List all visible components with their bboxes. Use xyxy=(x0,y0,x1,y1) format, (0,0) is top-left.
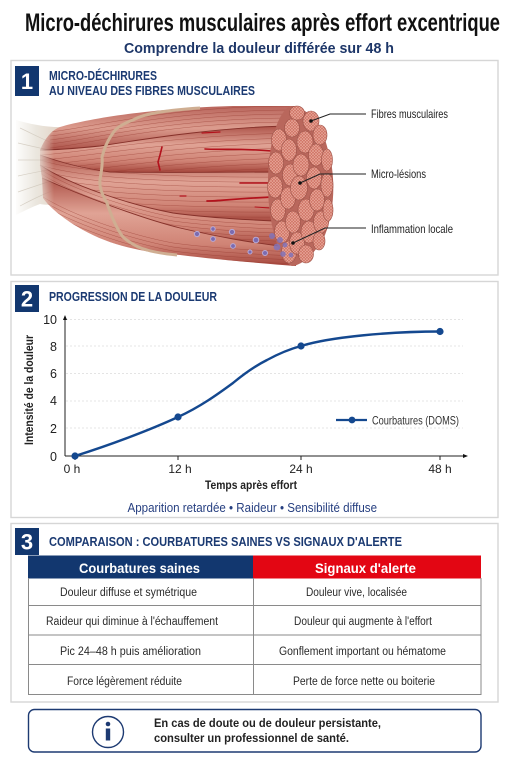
label: fibres musculaires xyxy=(309,107,448,123)
panel 2: pain progression xyxy=(11,282,498,518)
y tick labels: 2 xyxy=(50,422,57,436)
panel 1 heading xyxy=(49,68,255,98)
panel 3: comparison xyxy=(11,524,498,702)
label: inflammation locale: Inflammation locale xyxy=(371,222,453,236)
right column items xyxy=(279,587,446,688)
inflammation cells xyxy=(194,227,268,256)
left column items xyxy=(46,587,219,688)
left column items: Douleur diffuse et symétrique xyxy=(60,587,197,599)
badge 2 xyxy=(15,285,39,312)
label: inflammation locale xyxy=(291,222,453,245)
advice text xyxy=(154,718,381,745)
subtitle: Comprendre la douleur différée sur 48 h xyxy=(124,41,394,57)
muscle illustration xyxy=(16,106,333,268)
x tick labels: 12 h xyxy=(168,462,192,476)
right column items: Douleur vive, localisée xyxy=(306,587,407,599)
advice text: consulter un professionnel de santé. xyxy=(154,733,349,745)
panel 1 heading: AU NIVEAU DES FIBRES MUSCULAIRES xyxy=(49,84,255,98)
badge 1: 1 xyxy=(21,69,33,94)
right column items: Douleur qui augmente à l'effort xyxy=(294,616,433,628)
header: courbatures saines: Courbatures saines xyxy=(79,560,200,576)
badge 3: 3 xyxy=(21,530,33,554)
header: signaux d'alerte xyxy=(253,556,481,578)
header: courbatures saines xyxy=(28,556,253,578)
badge 2: 2 xyxy=(21,286,33,312)
badge 3 xyxy=(15,528,39,555)
y tick labels xyxy=(43,313,57,464)
cross-section of fascicles xyxy=(268,106,333,266)
left column items: Raideur qui diminue à l'échauffement xyxy=(46,616,219,628)
advice text: En cas de doute ou de douleur persistante, xyxy=(154,718,381,730)
panel 1 heading: MICRO-DÉCHIRURES xyxy=(49,68,157,83)
y tick labels: 0 xyxy=(50,450,57,464)
comparison table xyxy=(28,556,481,694)
legend xyxy=(336,414,459,428)
x axis title: Temps après effort xyxy=(205,478,297,492)
connective band xyxy=(100,108,200,255)
label: micro-lésions xyxy=(298,167,426,185)
x tick labels: 0 h xyxy=(64,462,80,476)
left column items: Force légèrement réduite xyxy=(67,676,182,688)
left column items: Pic 24–48 h puis amélioration xyxy=(60,646,201,658)
axes xyxy=(63,315,468,460)
label: fibres musculaires: Fibres musculaires xyxy=(371,107,448,121)
right column items: Perte de force nette ou boiterie xyxy=(293,676,435,688)
micro-tears xyxy=(158,132,272,208)
callout: advice xyxy=(28,710,481,752)
panel 1: muscle fibres xyxy=(11,60,498,275)
header: signaux d'alerte: Signaux d'alerte xyxy=(315,560,416,576)
right column items: Gonflement important ou hématome xyxy=(279,646,446,658)
panel 2 heading: PROGRESSION DE LA DOULEUR xyxy=(49,290,217,304)
y axis title: Intensité de la douleur xyxy=(22,335,36,445)
x tick labels xyxy=(64,462,452,476)
x tick labels: 48 h xyxy=(428,462,452,476)
label: micro-lésions: Micro-lésions xyxy=(371,167,426,181)
DOMS curve xyxy=(71,328,444,460)
y tick labels: 4 xyxy=(50,394,57,408)
legend: Courbatures (DOMS) xyxy=(372,414,459,428)
y tick labels: 10 xyxy=(43,313,57,327)
badge 1 xyxy=(15,66,39,96)
x tick labels: 24 h xyxy=(289,462,313,476)
panel 3 heading: COMPARAISON : COURBATURES SAINES VS SIGNAUX D'ALERTE xyxy=(49,535,402,549)
line chart xyxy=(22,313,468,492)
chart caption: Apparition retardée • Raideur • Sensibilité diffuse xyxy=(128,501,377,515)
icon: information xyxy=(92,716,124,748)
y tick labels: 6 xyxy=(50,367,57,381)
y tick labels: 8 xyxy=(50,340,57,354)
